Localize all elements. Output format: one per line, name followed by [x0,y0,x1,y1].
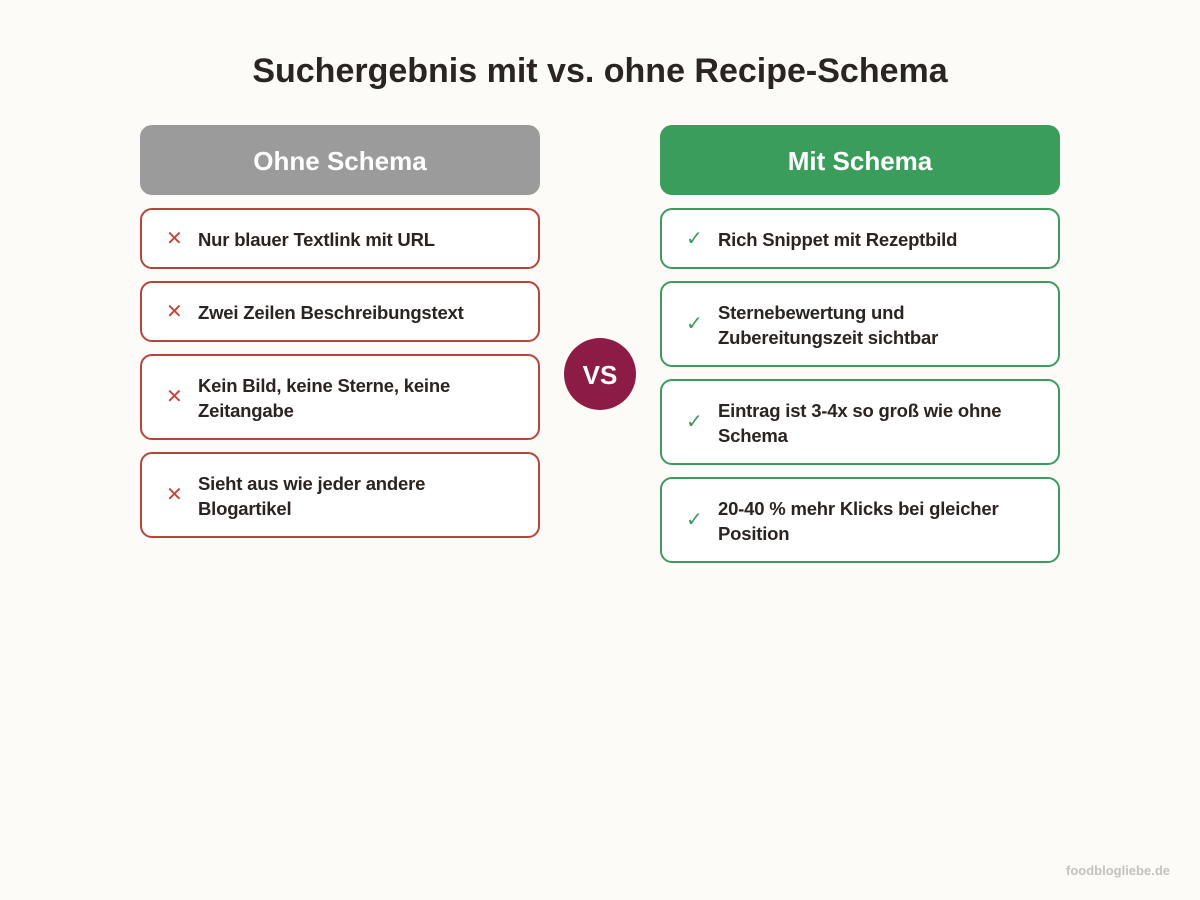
card: ohne 3: Kein Bild, keine Sterne, keine [198,375,450,396]
card: mit 3: Eintrag ist 3-4x so groß wie ohne [718,400,1001,421]
card: mit 3: Schema [718,425,788,446]
header: ohne schema: Ohne Schema [253,146,427,176]
card: mit 2: Zubereitungszeit sichtbar [718,327,938,348]
card: ohne 3: Zeitangabe [198,400,294,421]
card: mit 4: ✓ [686,509,703,531]
card: mit 3: ✓ [686,411,703,433]
header: mit schema [660,125,1060,195]
vs badge: VS [583,360,617,390]
card: mit 2: Sternebewertung und [718,302,904,323]
card: mit 4: Position [718,523,789,544]
card: mit 1: ✓ [686,228,703,250]
card: ohne 4: Sieht aus wie jeder andere [198,473,425,494]
card: mit 3 [660,379,1060,465]
card: ohne 1 [140,208,540,269]
card: mit 1: Rich Snippet mit Rezeptbild [718,228,957,250]
header: ohne schema [140,125,540,195]
card: ohne 4: Blogartikel [198,498,291,519]
card: mit 4: 20-40 % mehr Klicks bei gleicher [718,498,998,519]
title: Suchergebnis mit vs. ohne Recipe-Schema [252,52,948,90]
card: mit 4 [660,477,1060,563]
footer credit: foodblogliebe.de [1066,863,1170,878]
card: ohne 2 [140,281,540,342]
card: ohne 2: ✕ [166,300,183,322]
card: ohne 3 [140,354,540,440]
card: ohne 1: ✕ [166,228,183,250]
header: mit schema: Mit Schema [788,146,932,176]
card: mit 2 [660,281,1060,367]
card: ohne 4 [140,452,540,538]
card: ohne 1: Nur blauer Textlink mit URL [198,228,435,250]
card: mit 1 [660,208,1060,269]
card: ohne 2: Zwei Zeilen Beschreibungstext [198,302,464,322]
card: ohne 4: ✕ [166,484,183,506]
card: mit 2: ✓ [686,313,703,335]
card: ohne 3: ✕ [166,386,183,408]
vs badge [564,338,636,410]
